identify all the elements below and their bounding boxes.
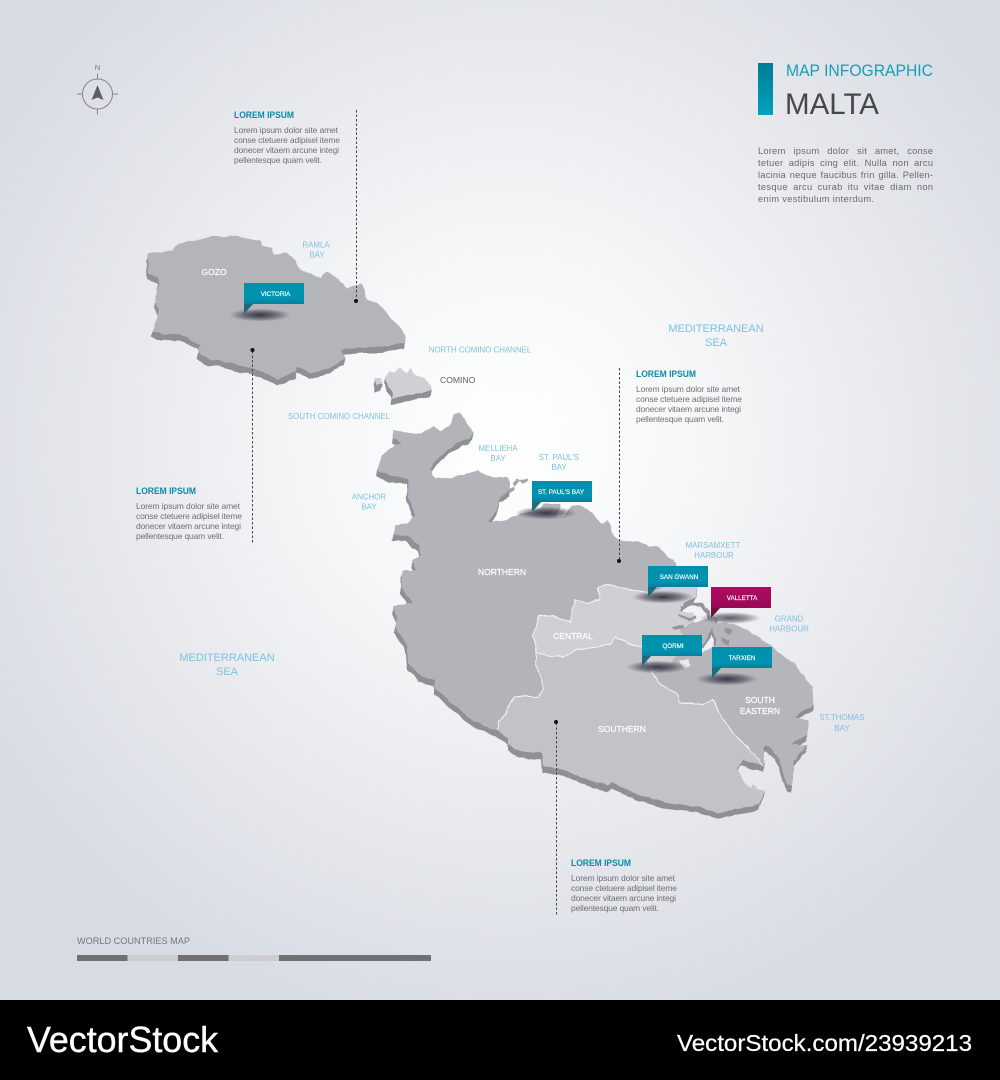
callout: top (Gozo north): Lorem ipsum dolor site amet bbox=[234, 125, 339, 135]
map: Gozo island bbox=[146, 235, 406, 385]
region: Southern bbox=[497, 637, 765, 813]
intro paragraph: enim vestibulum interdum. bbox=[758, 194, 874, 204]
intro paragraph: Lorem ipsum dolor sit amet, conse bbox=[758, 146, 933, 156]
sea and bay labels: MEDITERRANEAN bbox=[179, 652, 275, 664]
callout: right (Northern): pellentesque quam velit. bbox=[636, 414, 724, 424]
region labels: GOZO bbox=[201, 267, 227, 277]
footer band: VectorStock bbox=[27, 1019, 219, 1060]
sea and bay labels: RAMLA bbox=[302, 240, 330, 250]
region labels: SOUTHERN bbox=[598, 724, 646, 734]
intro paragraph: tetuer adipis cing elit. Nulla non arcu bbox=[758, 158, 933, 168]
callout: left (Gozo south): conse ctetuere adipisel iteme bbox=[136, 511, 242, 521]
callout: bottom (Southern) bbox=[554, 720, 677, 915]
sea and bay labels: GRAND bbox=[775, 614, 804, 624]
region: South Eastern bbox=[653, 617, 815, 786]
sea and bay labels: BAY bbox=[834, 724, 850, 733]
St Paul's islets bbox=[508, 478, 528, 493]
sea and bay labels: SEA bbox=[705, 337, 728, 349]
callout: right (Northern): LOREM IPSUM bbox=[636, 369, 696, 379]
callout: left (Gozo south): Lorem ipsum dolor site amet bbox=[136, 501, 241, 511]
callout: top (Gozo north): donecer vitaem arcune integi bbox=[234, 145, 339, 155]
callout: top (Gozo north): LOREM IPSUM bbox=[234, 110, 294, 120]
footer band bbox=[0, 1000, 1000, 1080]
callout: right (Northern) bbox=[617, 368, 742, 563]
title block: MALTA bbox=[785, 88, 879, 121]
region borders bbox=[497, 585, 763, 766]
pin: Qormi: QORMI bbox=[662, 643, 684, 650]
sea and bay labels: SOUTH COMINO CHANNEL bbox=[288, 412, 391, 421]
footer band: VectorStock.com/23939213 bbox=[677, 1030, 972, 1056]
pin: Victoria bbox=[229, 283, 304, 322]
callout: bottom (Southern): donecer vitaem arcune integi bbox=[571, 893, 676, 903]
title block: MAP INFOGRAPHIC bbox=[786, 62, 933, 80]
scale bar bbox=[77, 936, 431, 961]
pin: St. Paul's Bay: ST. PAUL'S BAY bbox=[538, 489, 585, 496]
callout: right (Northern): Lorem ipsum dolor site amet bbox=[636, 384, 741, 394]
pin: Tarxien bbox=[696, 647, 772, 686]
scale bar: WORLD COUNTRIES MAP bbox=[77, 936, 190, 946]
map: Malta main island bbox=[376, 413, 815, 819]
callout: left (Gozo south): pellentesque quam velit. bbox=[136, 531, 224, 541]
title block bbox=[758, 62, 933, 121]
callout: top (Gozo north): conse ctetuere adipisel iteme bbox=[234, 135, 340, 145]
sea and bay labels: HARBOUR bbox=[769, 624, 809, 634]
pin: San Gwann bbox=[632, 566, 708, 604]
sea and bay labels: MELLIEHA bbox=[478, 444, 518, 453]
region labels: NORTHERN bbox=[478, 567, 526, 577]
harbour details bbox=[671, 604, 762, 796]
sea and bay labels: BAY bbox=[551, 463, 567, 472]
callout: right (Northern): donecer vitaem arcune integi bbox=[636, 404, 741, 414]
sea and bay labels: MEDITERRANEAN bbox=[668, 323, 764, 335]
pin: Valletta: VALLETTA bbox=[727, 595, 758, 602]
pin: Valletta bbox=[699, 587, 771, 624]
region labels bbox=[201, 267, 780, 734]
sea and bay labels: NORTH COMINO CHANNEL bbox=[429, 346, 532, 354]
region labels: CENTRAL bbox=[553, 631, 593, 641]
callout: bottom (Southern): pellentesque quam velit. bbox=[571, 903, 659, 913]
region labels: COMINO bbox=[440, 375, 476, 385]
region labels: EASTERN bbox=[740, 706, 780, 716]
pin: Tarxien: TARXIEN bbox=[729, 655, 756, 662]
sea and bay labels: BAY bbox=[361, 502, 377, 512]
sea and bay labels: ST.THOMAS bbox=[819, 713, 865, 722]
callout: left (Gozo south) bbox=[136, 348, 254, 543]
region: Central bbox=[533, 568, 697, 672]
callout: bottom (Southern): LOREM IPSUM bbox=[571, 858, 631, 868]
pin: Qormi bbox=[626, 635, 702, 674]
pin: San Gwann: SAN ĠWANN bbox=[660, 572, 699, 581]
sea and bay labels: BAY bbox=[490, 454, 506, 463]
sea and bay labels: ST. PAUL'S bbox=[539, 453, 579, 462]
callout: bottom (Southern): Lorem ipsum dolor site amet bbox=[571, 873, 676, 883]
intro paragraph: lacinia neque faucibus frin gilla. Pellen- bbox=[758, 170, 933, 180]
callout: top (Gozo north): pellentesque quam velit. bbox=[234, 155, 322, 165]
sea and bay labels: SEA bbox=[216, 666, 239, 678]
intro paragraph: tesque arcu curab itu vitae diam non bbox=[758, 182, 933, 192]
pin: Victoria: VICTORIA bbox=[261, 291, 291, 298]
sea and bay labels bbox=[179, 240, 865, 733]
sea and bay labels: HARBOUR bbox=[694, 551, 734, 560]
callout: right (Northern): conse ctetuere adipisel iteme bbox=[636, 394, 742, 404]
callout: left (Gozo south): LOREM IPSUM bbox=[136, 486, 196, 496]
map: Comino island bbox=[373, 368, 431, 404]
compass icon bbox=[77, 63, 118, 114]
intro paragraph bbox=[758, 146, 933, 204]
sea and bay labels: ANCHOR bbox=[352, 492, 386, 502]
sea and bay labels: BAY bbox=[309, 250, 325, 260]
compass icon: N bbox=[95, 63, 100, 72]
region labels: SOUTH bbox=[745, 695, 775, 705]
pin: St. Paul's Bay bbox=[515, 481, 592, 520]
callout: left (Gozo south): donecer vitaem arcune integi bbox=[136, 521, 241, 531]
callout: bottom (Southern): conse ctetuere adipisel iteme bbox=[571, 883, 677, 893]
sea and bay labels: MARSAMXETT bbox=[686, 541, 741, 550]
callout: top (Gozo north) bbox=[234, 110, 358, 303]
region: Northern bbox=[377, 413, 678, 730]
